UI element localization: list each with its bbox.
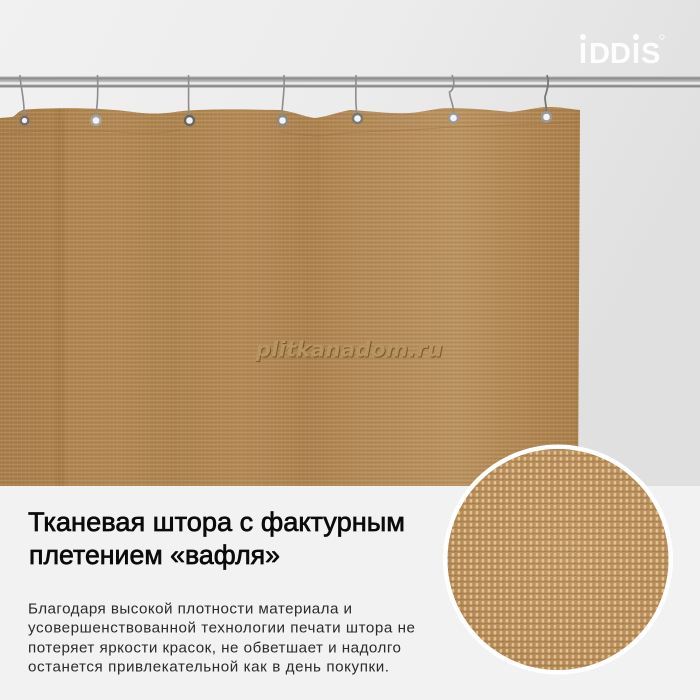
body text: потеряет яркости красок, не обветшает и надолго — [28, 639, 401, 656]
curtain rod — [0, 76, 700, 88]
hook 6 — [449, 75, 458, 122]
heading — [28, 507, 405, 570]
hook 2 — [92, 75, 100, 125]
embossed watermark: plitkanadom.ru — [254, 338, 443, 362]
fold shadows — [63, 110, 577, 486]
curtain fabric — [0, 107, 580, 486]
body text: останется привлекательной как в день покупки. — [28, 659, 389, 676]
magnified fabric circle — [443, 444, 673, 674]
embossed watermark: plitkanadom.ru — [255, 338, 444, 362]
heading: Тканевая штора с фактурным — [28, 507, 405, 537]
heading: плетением «вафля» — [29, 540, 280, 570]
hook 3 — [185, 75, 194, 125]
curtain hem seam — [0, 122, 578, 136]
body text — [28, 600, 415, 676]
hook 1 — [20, 75, 28, 124]
body text: усовершенствованной технологии печати штора не — [28, 620, 415, 637]
body text: Благодаря высокой плотности материала и — [28, 600, 352, 617]
curtain hooks and grommets — [20, 75, 551, 125]
hook 5 — [353, 75, 362, 123]
hook 4 — [278, 75, 287, 125]
brand logo: IDDIS — [579, 38, 660, 70]
background wall — [0, 0, 700, 486]
hook 7 — [542, 75, 551, 122]
bottom text panel background — [0, 486, 700, 700]
